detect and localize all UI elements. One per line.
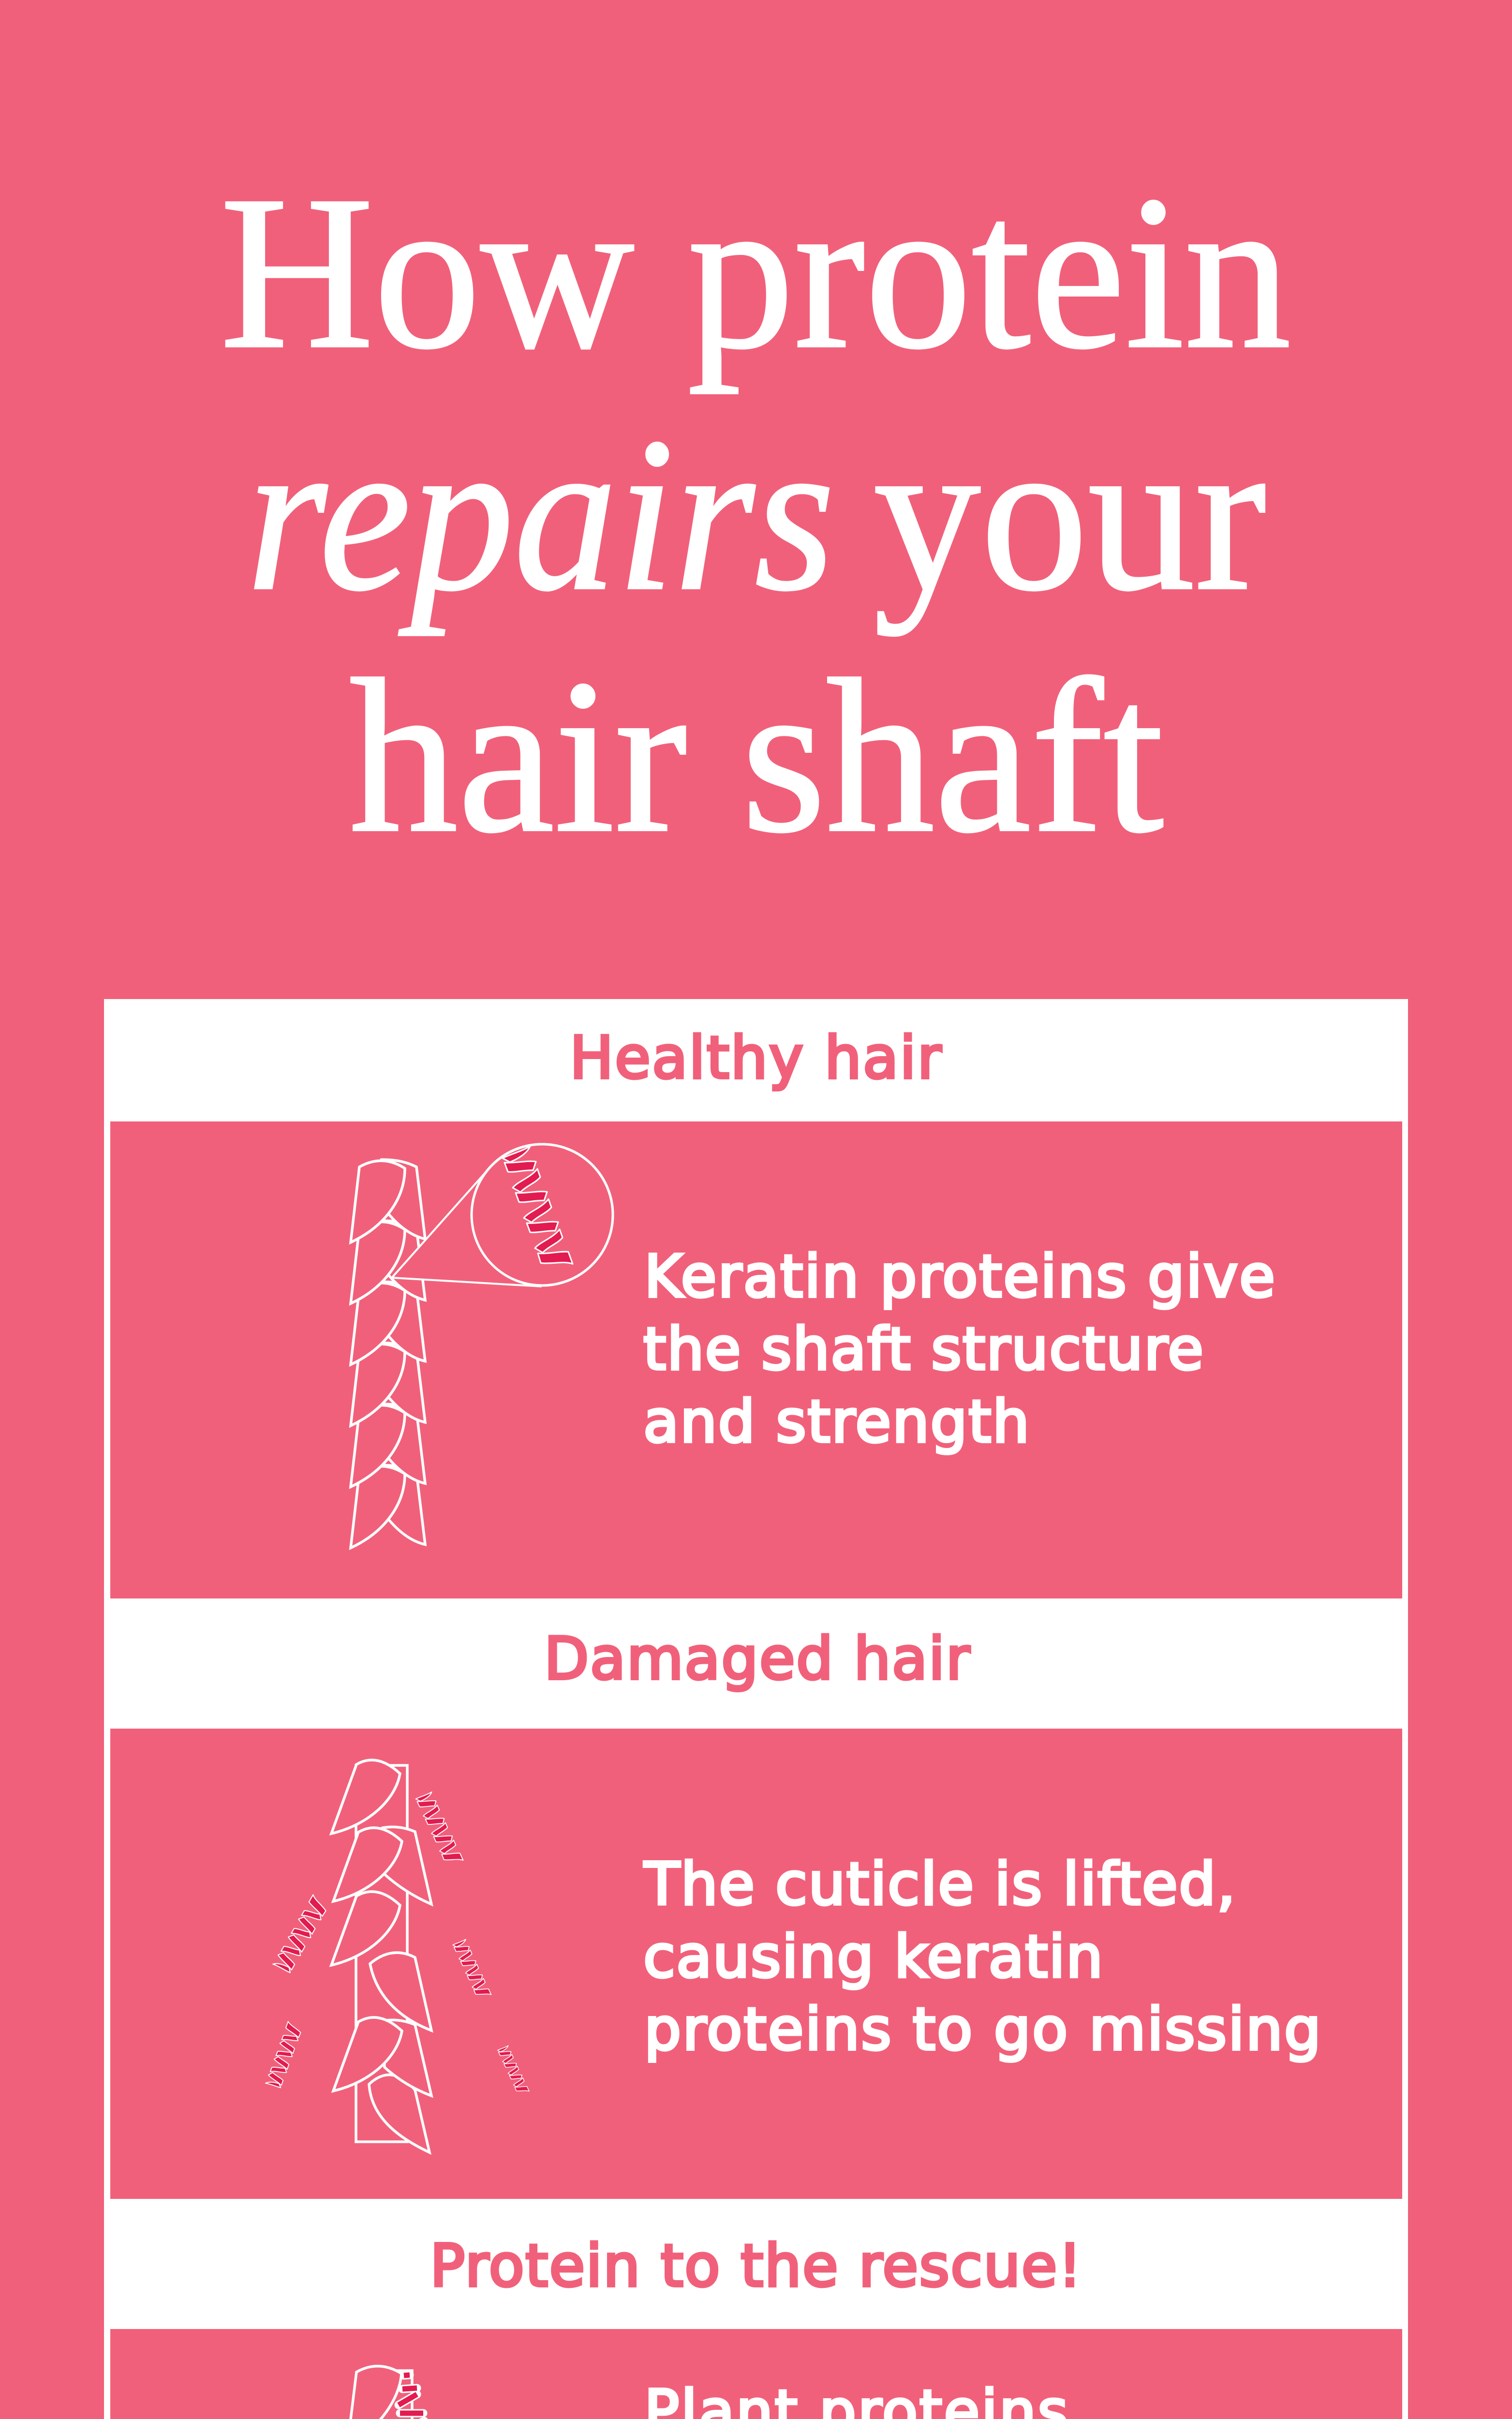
heading: damaged hair: Damaged hair: [544, 1626, 970, 1693]
body text: healthy: the shaft structure: [643, 1316, 1203, 1383]
panel background: damaged: [110, 1729, 1402, 2199]
panel background: rescue: [110, 2329, 1402, 2419]
white frame: [104, 999, 1408, 2419]
hair shaft illustration with proteins: rescue: [339, 2366, 432, 2419]
title: hair shaft: [349, 635, 1165, 878]
body text: healthy: [643, 1243, 1275, 1456]
keratin helix: upper right: [415, 1792, 463, 1860]
panel: protein to the rescue: [110, 2233, 1402, 2419]
keratin helix: lower right: [497, 2046, 529, 2091]
heading: protein to the rescue: Protein to the rescue!: [430, 2233, 1082, 2300]
body text: healthy: Keratin proteins give: [644, 1243, 1275, 1311]
body text: damaged: [643, 1851, 1321, 2063]
body text: damaged: The cuticle is lifted,: [644, 1851, 1235, 1918]
hair shaft illustration: healthy: [351, 1160, 425, 1548]
keratin helix: upper left: [255, 1895, 342, 1978]
heading: healthy hair: Healthy hair: [570, 1025, 942, 1092]
body text: damaged: proteins to go missing: [644, 1996, 1321, 2063]
body text: damaged: causing keratin: [643, 1924, 1103, 1991]
protein helix: upper: [399, 2375, 430, 2419]
panel background: healthy: [110, 1121, 1402, 1598]
keratin helix: lower left: [249, 2021, 316, 2092]
title: [220, 151, 1291, 878]
keratin helix in magnifier: [503, 1146, 573, 1264]
panel: damaged hair: [110, 1626, 1402, 2199]
title: repairs: [247, 393, 835, 637]
panel: healthy hair: [110, 1025, 1402, 1598]
title: How protein: [220, 151, 1291, 395]
body text: healthy: and strength: [643, 1389, 1029, 1456]
hair shaft illustration: damaged: [331, 1760, 431, 2152]
magnifier callout: [392, 1144, 613, 1286]
title: your: [874, 393, 1266, 637]
keratin helix: middle right: [452, 1939, 491, 1995]
